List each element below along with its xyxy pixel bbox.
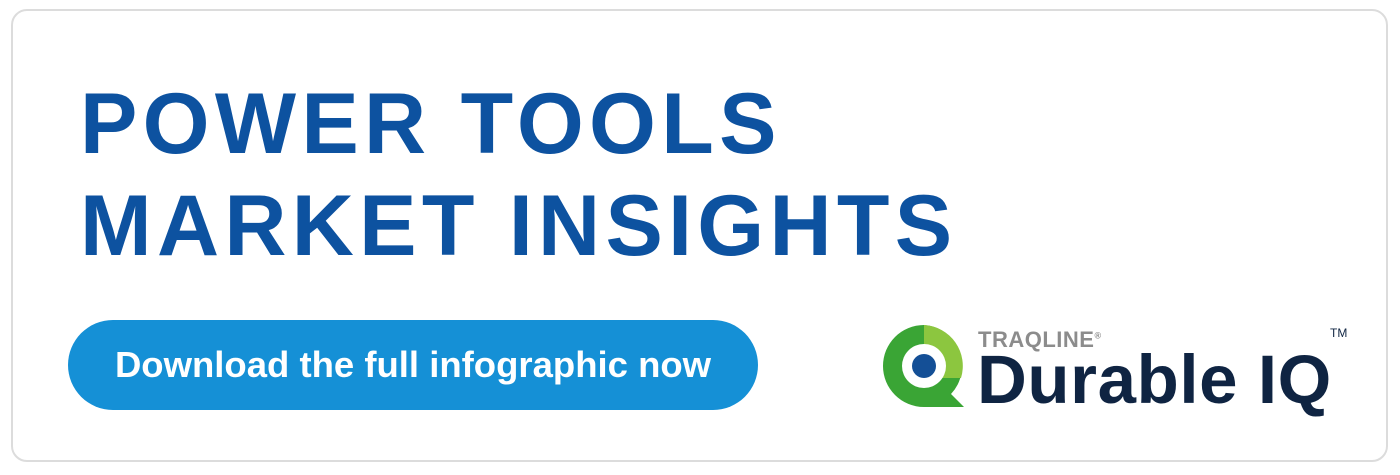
icon: logo mark [883, 325, 964, 407]
title: MARKET INSIGHTS [80, 178, 957, 274]
button: download: Download the full infographic now [115, 344, 711, 385]
button: download [68, 320, 758, 410]
text: TM: TM [1330, 326, 1347, 340]
text: Durable IQ: Durable IQ [977, 341, 1332, 418]
title [80, 76, 957, 274]
logo: Traqline Durable IQ [883, 325, 1347, 418]
title: POWER TOOLS [80, 76, 782, 172]
text: TRAQLINE: TRAQLINE® [978, 327, 1102, 352]
